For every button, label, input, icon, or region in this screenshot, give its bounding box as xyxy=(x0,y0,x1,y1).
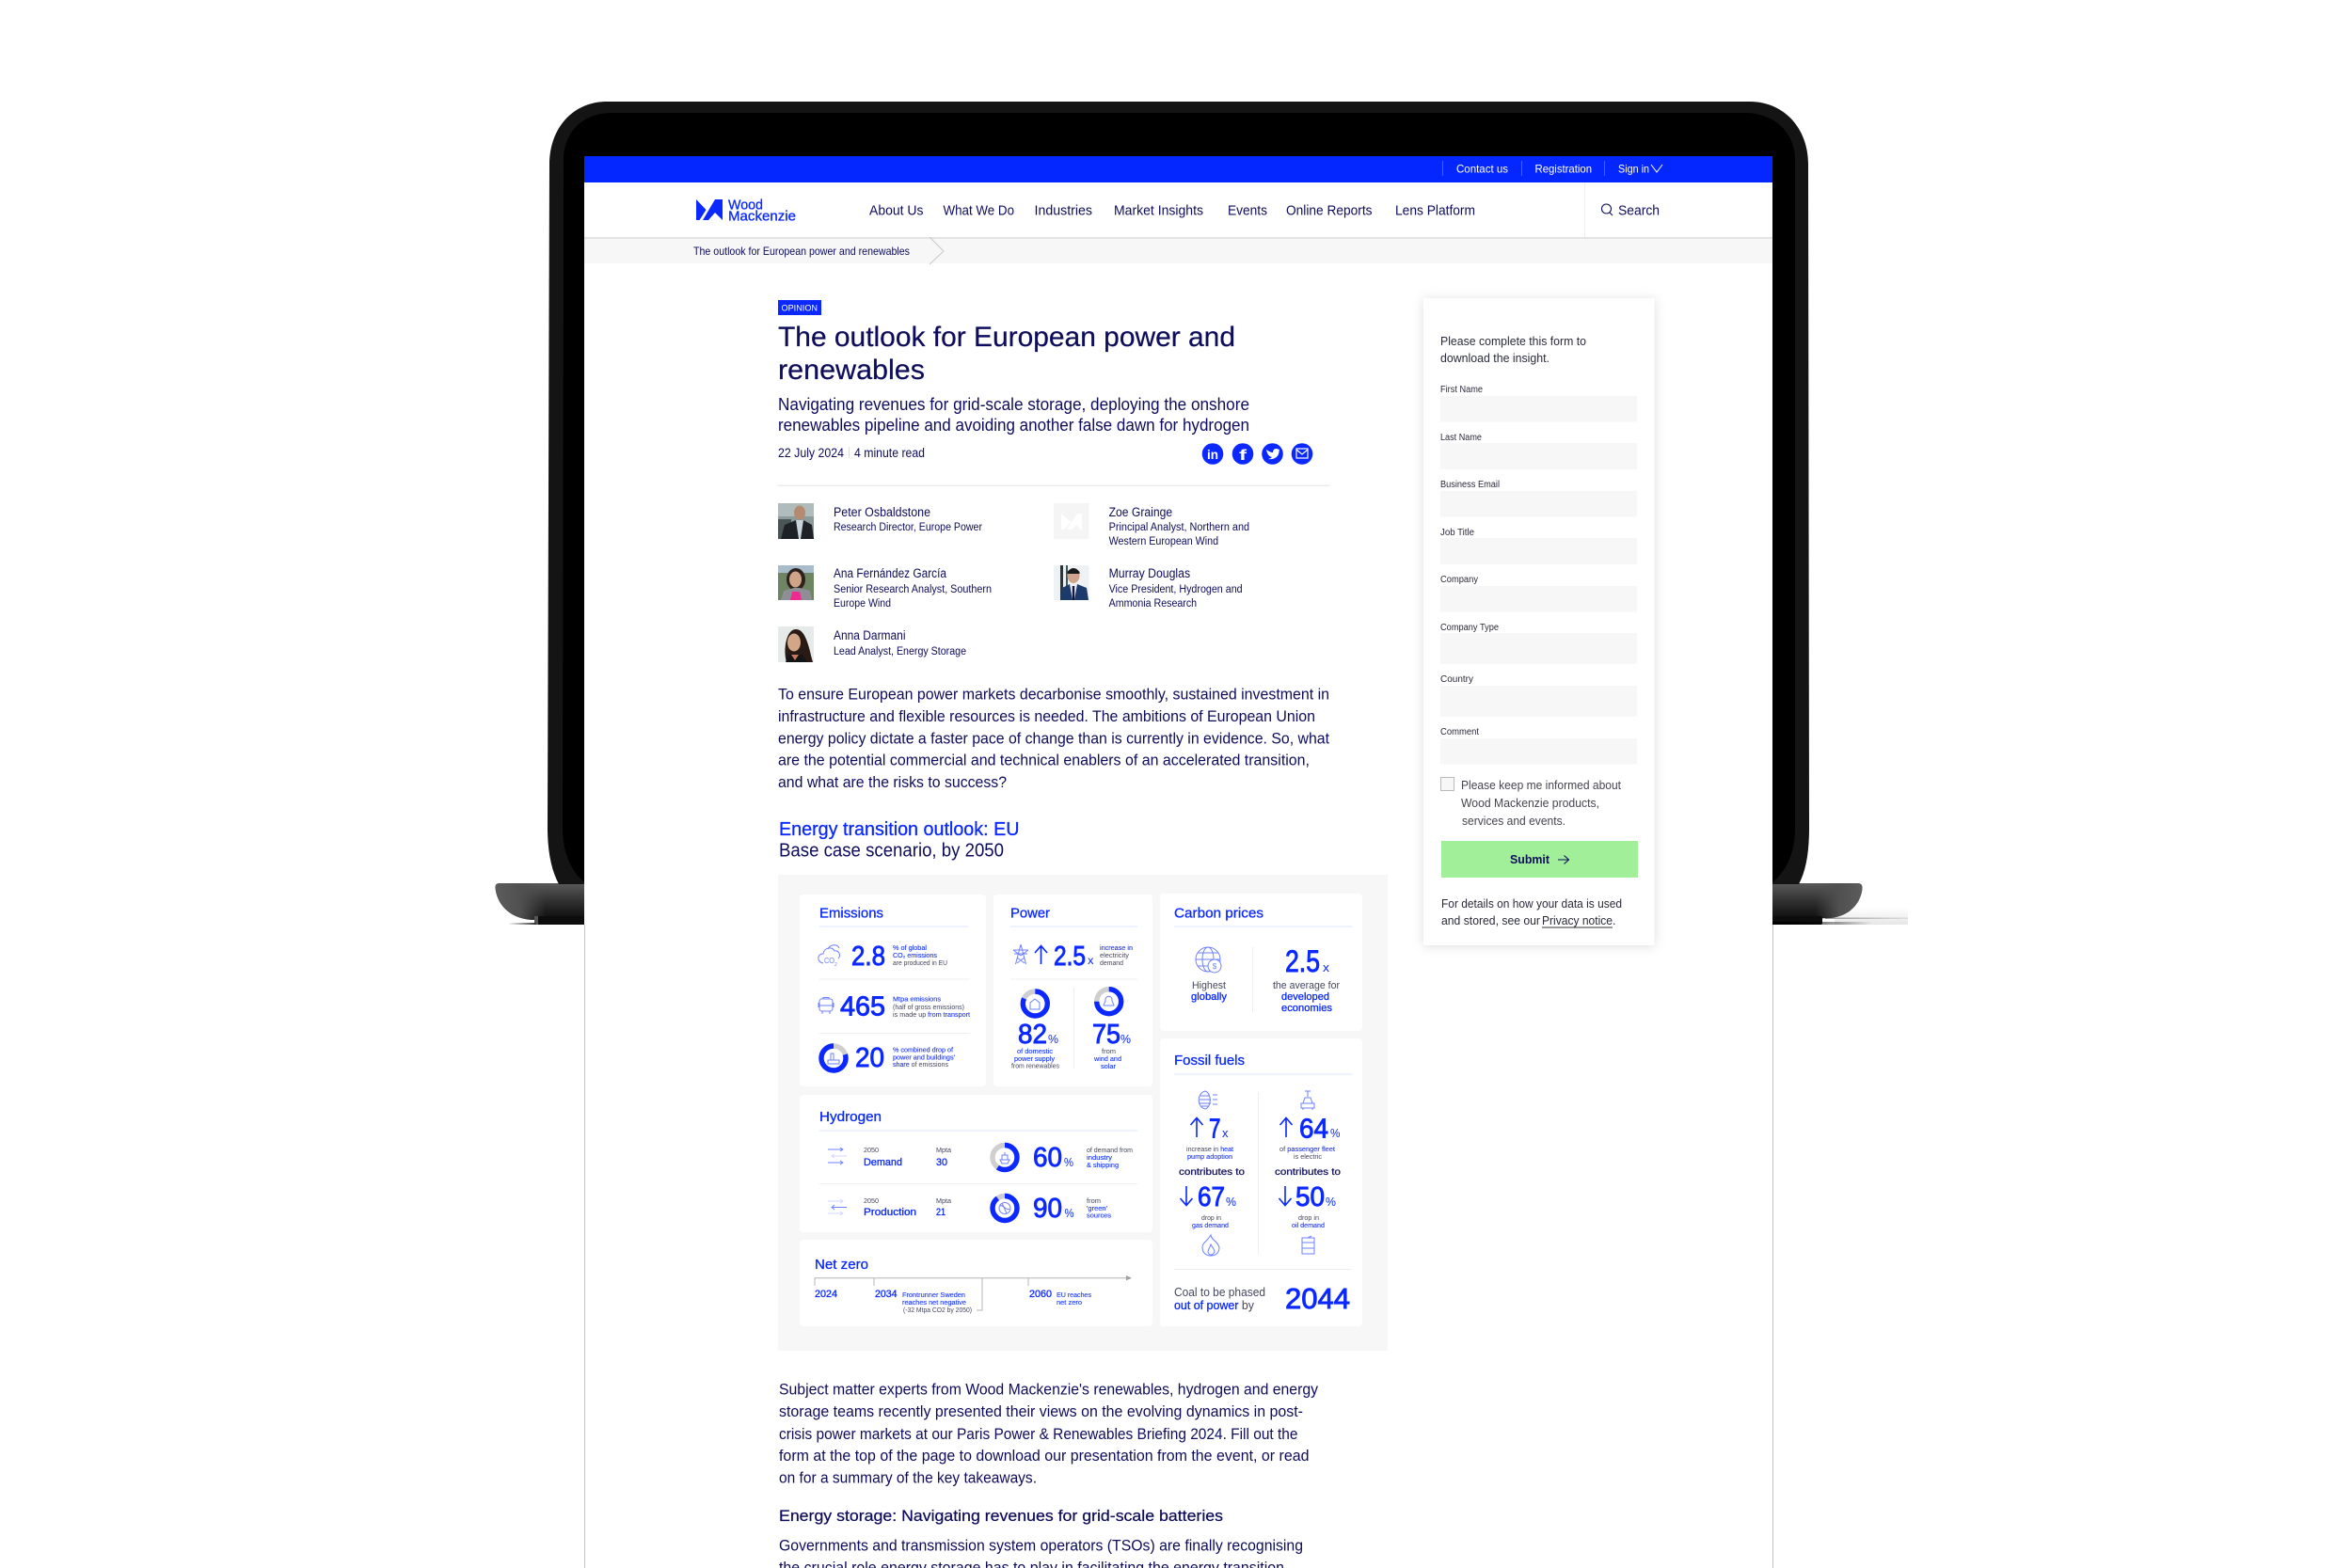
second paragraph: Subject matter experts from Wood Mackenzie's renewables, hydrogen and energy xyxy=(779,1381,1318,1399)
icon: electric car xyxy=(1301,1091,1314,1110)
social share icons: f xyxy=(1239,448,1248,464)
social share icons xyxy=(1202,443,1312,465)
infographic heading: Energy transition outlook: EU xyxy=(779,819,1020,840)
checkbox and consent text: Wood Mackenzie products, xyxy=(1461,797,1599,810)
nav links: About Us xyxy=(869,203,924,218)
card: Power: 82 xyxy=(1018,1020,1047,1050)
donut: 82% xyxy=(1023,991,1047,1016)
card: Emissions: Emissions xyxy=(819,906,883,922)
card: Hydrogen: 2050 xyxy=(864,1148,879,1154)
icon: CO2 cloud: CO xyxy=(824,957,834,965)
card: Hydrogen: from xyxy=(1087,1198,1101,1205)
field: Job Title: Job Title xyxy=(1440,528,1474,538)
nav links: Events xyxy=(1228,203,1267,218)
section heading: energy storage: Energy storage: Navigating revenues for grid-scale batteries xyxy=(779,1507,1223,1525)
card: Fossil fuels xyxy=(1160,1038,1362,1326)
card: Emissions: share of emissions xyxy=(893,1062,949,1069)
card: Power: from xyxy=(1102,1049,1116,1055)
intro paragraph xyxy=(778,685,1329,791)
card: Fossil fuels: Coal to be phased xyxy=(1174,1285,1265,1299)
social share icons: in xyxy=(1207,447,1218,462)
second paragraph xyxy=(779,1381,1318,1486)
author: Peter Osbaldstone xyxy=(778,503,982,539)
privacy note: Privacy notice xyxy=(1542,914,1613,927)
card: Power: % xyxy=(1048,1032,1058,1046)
icon: demand arrows xyxy=(828,1148,847,1164)
card: Emissions: power and buildings' xyxy=(893,1055,955,1062)
icon: heat pump xyxy=(1199,1091,1217,1109)
date and read time: 4 minute read xyxy=(854,446,925,460)
card: Fossil fuels: 67 xyxy=(1198,1182,1225,1212)
author: Ana Fernández García: Senior Research Analyst, Southern xyxy=(834,584,992,595)
web page screen xyxy=(584,156,1773,1568)
card: Power: from renewables xyxy=(1011,1064,1059,1070)
arrow: down oil xyxy=(1279,1186,1291,1206)
search xyxy=(1601,203,1660,218)
author: Ana Fernández García: Europe Wind xyxy=(834,598,891,610)
card: Fossil fuels: contributes to xyxy=(1275,1166,1341,1178)
privacy note: For details on how your data is used xyxy=(1441,897,1622,911)
card: Fossil fuels: contributes to xyxy=(1179,1166,1245,1178)
card: Hydrogen: 'green' xyxy=(1087,1206,1107,1212)
article title: The outlook for European power and xyxy=(778,322,1235,353)
card: Power: wind and xyxy=(1093,1056,1121,1063)
icon: CO2 cloud: 2 xyxy=(834,962,837,968)
field: Comment xyxy=(1440,727,1637,764)
card: Net zero timeline: 2034 xyxy=(875,1289,898,1300)
intro paragraph: are the potential commercial and technical enablers of an accelerated transition, xyxy=(778,752,1310,769)
author: Anna Darmani: Lead Analyst, Energy Storage xyxy=(834,646,966,657)
author: Ana Fernández García: Ana Fernández García xyxy=(834,566,946,580)
card: Fossil fuels: 64 xyxy=(1299,1114,1328,1144)
top utility bar: Registration xyxy=(1535,162,1592,175)
nav links: Online Reports xyxy=(1286,203,1372,218)
card: Emissions: Mtpa emissions xyxy=(893,997,942,1004)
arrow: up fleet xyxy=(1279,1117,1293,1137)
icon: oil barrel xyxy=(1302,1236,1314,1254)
author: Anna Darmani: Anna Darmani xyxy=(834,628,905,642)
section paragraph: Governments and transmission system operators (TSOs) are finally recognising xyxy=(779,1537,1303,1555)
card: Emissions: 2.8 xyxy=(851,942,885,972)
donut: 20% xyxy=(821,1046,846,1070)
card: Hydrogen: Hydrogen xyxy=(819,1109,882,1125)
author: Murray Douglas: Ammonia Research xyxy=(1109,598,1197,610)
badge: opinion: OPINION xyxy=(781,303,818,314)
nav links: Industries xyxy=(1035,203,1092,218)
article title: renewables xyxy=(778,355,925,386)
badge: opinion xyxy=(778,300,821,315)
field: Company: Company xyxy=(1440,575,1478,585)
field: Job Title xyxy=(1440,528,1637,564)
card: Emissions: % of global xyxy=(893,945,927,952)
card: Power: % xyxy=(1120,1032,1131,1046)
article subtitle: renewables pipeline and avoiding another false dawn for hydrogen xyxy=(778,416,1249,435)
card: Hydrogen: Mpta xyxy=(936,1148,951,1154)
card: Emissions: 20 xyxy=(855,1043,884,1073)
card: Fossil fuels: out of power by xyxy=(1174,1298,1254,1312)
card: Net zero timeline xyxy=(800,1240,1152,1326)
privacy note: and stored, see our xyxy=(1441,914,1540,927)
date and read time: 22 July 2024 xyxy=(778,446,844,460)
logo: Wood Mackenzie: Wood xyxy=(728,198,763,213)
field: Company xyxy=(1440,575,1637,611)
card: Emissions: CO₂ emissions xyxy=(893,953,937,959)
card: Carbon prices xyxy=(1160,894,1362,1031)
author: Zoe Grainge: Principal Analyst, Northern and xyxy=(1109,522,1249,533)
checkbox and consent text: services and events. xyxy=(1462,815,1565,828)
card: Emissions: (half of gross emissions) xyxy=(893,1005,964,1011)
field: First Name: First Name xyxy=(1440,385,1483,395)
author: Zoe Grainge: Western European Wind xyxy=(1109,536,1218,547)
card: Hydrogen: Production xyxy=(864,1207,916,1218)
download form card xyxy=(1423,298,1654,945)
nav links: Market Insights xyxy=(1114,203,1203,218)
card: Carbon prices: the average for xyxy=(1273,980,1340,991)
author: Peter Osbaldstone: Research Director, Europe Power xyxy=(834,522,982,533)
second paragraph: form at the top of the page to download our presentation from the event, or read xyxy=(779,1447,1310,1465)
card: Net zero timeline: (-32 Mtpa CO2 by 2050) xyxy=(903,1307,972,1314)
checkbox and consent text: Please keep me informed about xyxy=(1461,779,1622,792)
author: Anna Darmani xyxy=(778,626,966,662)
icon: pylon xyxy=(1013,944,1028,964)
icon: production arrows xyxy=(828,1199,847,1215)
second paragraph: crisis power markets at our Paris Power & Renewables Briefing 2024. Fill out the xyxy=(779,1425,1298,1443)
author: Ana Fernández García xyxy=(778,565,992,610)
card: Carbon prices: developed xyxy=(1281,991,1329,1003)
donut: 90% xyxy=(993,1196,1017,1221)
submit button: Submit xyxy=(1510,853,1550,866)
second paragraph: storage teams recently presented their views on the evolving dynamics in post- xyxy=(779,1402,1303,1420)
card: Power: Power xyxy=(1010,906,1050,922)
field: First Name xyxy=(1440,385,1637,421)
intro paragraph: and what are the risks to success? xyxy=(778,773,1007,791)
field: Last Name xyxy=(1440,433,1637,469)
field: Company Type xyxy=(1440,623,1637,664)
card: Net zero timeline: EU reaches xyxy=(1057,1292,1091,1299)
infographic panel xyxy=(778,875,1388,1351)
logo: Wood Mackenzie xyxy=(696,198,796,224)
card: Carbon prices: Carbon prices xyxy=(1174,906,1263,922)
authors xyxy=(778,503,1249,662)
card: Fossil fuels: x xyxy=(1222,1126,1229,1140)
field: Business Email: Business Email xyxy=(1440,480,1500,490)
icon: CO2 cloud xyxy=(818,945,839,968)
card: Carbon prices: 2.5 xyxy=(1285,944,1320,978)
card: Fossil fuels: % xyxy=(1330,1126,1341,1140)
card: Hydrogen: 60 xyxy=(1033,1143,1062,1173)
card: Carbon prices: Highest xyxy=(1192,980,1226,991)
card: Net zero timeline: reaches net negative xyxy=(902,1300,966,1307)
card: Power xyxy=(993,895,1152,1086)
arrow: up xyxy=(1035,946,1047,964)
checkbox and consent text xyxy=(1441,777,1622,828)
author: Murray Douglas xyxy=(1054,565,1243,610)
intro paragraph: energy policy dictate a faster pace of change than is currently in evidence. So, what xyxy=(778,729,1329,747)
date and read time xyxy=(778,446,925,460)
top utility bar xyxy=(584,156,1772,182)
card: Carbon prices: x xyxy=(1323,960,1330,974)
infographic heading xyxy=(779,819,1020,862)
nav links: What We Do xyxy=(943,203,1014,218)
card: Hydrogen: 30 xyxy=(936,1157,947,1168)
card: Power: solar xyxy=(1101,1064,1117,1070)
top utility bar: Sign in xyxy=(1618,162,1649,175)
field: Comment: Comment xyxy=(1440,727,1479,737)
laptop frame xyxy=(495,102,1908,925)
card: Fossil fuels: 50 xyxy=(1295,1182,1325,1212)
author: Murray Douglas: Vice President, Hydrogen and xyxy=(1109,584,1243,595)
privacy note: . xyxy=(1613,914,1615,927)
card: Fossil fuels: drop in xyxy=(1201,1215,1221,1222)
card: Fossil fuels: is electric xyxy=(1294,1154,1322,1161)
card: Emissions: 465 xyxy=(840,992,885,1022)
field: Last Name: Last Name xyxy=(1440,433,1482,443)
laptop base right xyxy=(1772,883,1908,925)
card: Fossil fuels: drop in xyxy=(1298,1215,1319,1222)
submit button xyxy=(1441,841,1638,878)
article subtitle xyxy=(778,395,1249,435)
download form card: download the insight. xyxy=(1440,351,1549,365)
card: Power: x xyxy=(1088,954,1093,967)
icon: flame xyxy=(1202,1235,1219,1256)
card: Carbon prices: globally xyxy=(1191,991,1227,1003)
icon: globe with dollar: $ xyxy=(1213,962,1217,971)
nav links: Lens Platform xyxy=(1395,203,1475,218)
card: Power: increase in xyxy=(1100,945,1133,952)
nav links xyxy=(869,203,1475,218)
card: Hydrogen: 2050 xyxy=(864,1198,879,1205)
intro paragraph: infrastructure and flexible resources is needed. The ambitions of European Union xyxy=(778,707,1315,725)
card: Net zero timeline: 2060 xyxy=(1029,1289,1052,1300)
icon: bus xyxy=(818,997,834,1014)
download form card: Please complete this form to xyxy=(1440,334,1586,348)
breadcrumb xyxy=(584,237,1772,264)
card: Power: electricity xyxy=(1100,953,1130,959)
card: Hydrogen: Demand xyxy=(864,1157,902,1168)
privacy note xyxy=(1441,897,1622,927)
card: Net zero timeline: Frontrunner Sweden xyxy=(902,1292,965,1299)
card: Hydrogen: & shipping xyxy=(1087,1163,1119,1169)
card: Net zero timeline: 2024 xyxy=(815,1289,837,1300)
top utility bar: Contact us xyxy=(1456,162,1508,175)
card: Carbon prices: economies xyxy=(1281,1003,1332,1014)
field: Business Email xyxy=(1440,480,1637,517)
card: Emissions: is made up from transport xyxy=(893,1012,970,1019)
card: Fossil fuels: 2044 xyxy=(1285,1282,1350,1315)
card: Power: demand xyxy=(1100,960,1123,967)
card: Hydrogen: % xyxy=(1065,1206,1074,1220)
donut: 75% xyxy=(1097,990,1121,1014)
article title xyxy=(778,322,1235,386)
field: Country xyxy=(1440,674,1637,717)
field: Country: Country xyxy=(1440,674,1473,685)
card: Fossil fuels: % xyxy=(1226,1195,1236,1209)
card: Fossil fuels: oil demand xyxy=(1292,1223,1325,1229)
card: Hydrogen: 21 xyxy=(936,1207,946,1218)
card: Emissions: are produced in EU xyxy=(893,960,947,967)
card: Hydrogen: industry xyxy=(1087,1155,1113,1162)
navigation bar xyxy=(584,182,1772,239)
card: Fossil fuels: % xyxy=(1326,1195,1336,1209)
card: Hydrogen: sources xyxy=(1087,1213,1112,1219)
card: Power: power supply xyxy=(1014,1056,1056,1063)
search: Search xyxy=(1618,203,1660,218)
timeline axis xyxy=(815,1275,1132,1310)
author: Murray Douglas: Murray Douglas xyxy=(1109,566,1190,580)
card: Hydrogen: Mpta xyxy=(936,1198,951,1205)
infographic heading: Base case scenario, by 2050 xyxy=(779,841,1004,862)
author: Zoe Grainge: Zoe Grainge xyxy=(1109,505,1172,519)
card: Hydrogen: of demand from xyxy=(1087,1148,1133,1154)
intro paragraph: To ensure European power markets decarbonise smoothly, sustained investment in xyxy=(778,685,1329,703)
card: Emissions xyxy=(800,895,986,1086)
breadcrumb: The outlook for European power and renewables xyxy=(693,245,910,258)
card: Power: of domestic xyxy=(1017,1049,1054,1055)
card: Net zero timeline: Net zero xyxy=(815,1257,868,1273)
field: Company Type: Company Type xyxy=(1440,623,1499,633)
card: Fossil fuels: Fossil fuels xyxy=(1174,1053,1245,1069)
arrow: down gas xyxy=(1180,1186,1193,1206)
card: Fossil fuels: of passenger fleet xyxy=(1279,1147,1335,1153)
laptop screen surround xyxy=(563,113,1795,882)
second paragraph: on for a summary of the key takeaways. xyxy=(779,1468,1037,1486)
laptop bezel xyxy=(548,102,1809,884)
laptop base left xyxy=(495,883,584,925)
donut: 60% xyxy=(993,1146,1017,1170)
card: Fossil fuels: gas demand xyxy=(1192,1223,1229,1229)
author: Zoe Grainge xyxy=(1054,503,1249,547)
card: Fossil fuels: increase in heat xyxy=(1186,1147,1233,1153)
article subtitle: Navigating revenues for grid-scale storage, deploying the onshore xyxy=(778,395,1249,414)
card: Net zero timeline: net zero xyxy=(1057,1300,1082,1307)
card: Power: 75 xyxy=(1092,1020,1120,1050)
card: Emissions: % combined drop of xyxy=(893,1048,953,1054)
card: Fossil fuels: pump adoption xyxy=(1187,1154,1232,1161)
section paragraph xyxy=(779,1537,1303,1568)
icon: globe with dollar xyxy=(1196,947,1221,973)
card: Hydrogen: 90 xyxy=(1033,1194,1062,1224)
arrow: up heat xyxy=(1191,1117,1202,1137)
card: Hydrogen xyxy=(800,1095,1152,1232)
card: Power: 2.5 xyxy=(1054,942,1086,972)
author: Peter Osbaldstone: Peter Osbaldstone xyxy=(834,505,930,519)
card: Hydrogen: % xyxy=(1064,1155,1073,1169)
logo: Wood Mackenzie: Mackenzie xyxy=(728,209,796,224)
card: Fossil fuels: 7 xyxy=(1209,1114,1221,1144)
